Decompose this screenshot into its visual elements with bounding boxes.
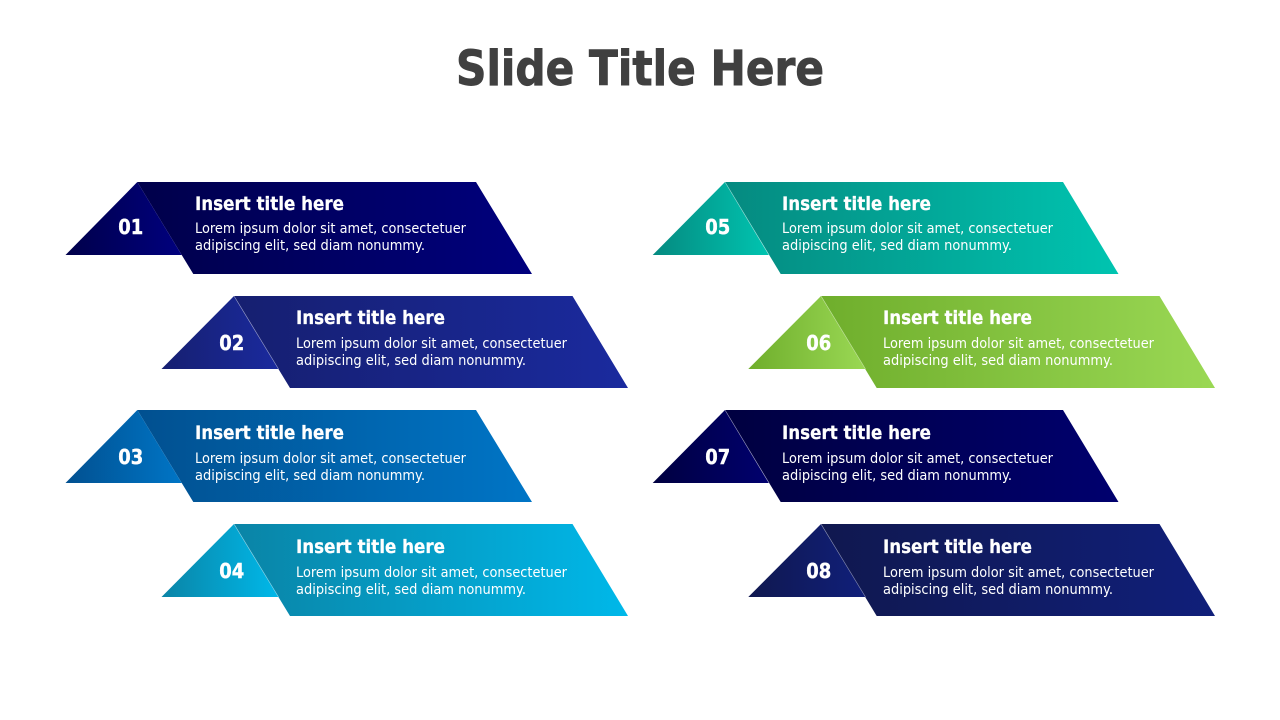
panel: item 08: Lorem ipsum dolor sit amet, consectetuer bbox=[883, 565, 1154, 581]
panel: item 06: Insert title here bbox=[883, 307, 1032, 329]
panel: item 01 bbox=[66, 182, 532, 274]
panel: item 07: adipiscing elit, sed diam nonummy. bbox=[782, 468, 1012, 484]
panel: item 04: Lorem ipsum dolor sit amet, consectetuer bbox=[296, 565, 567, 581]
panel: item 08 bbox=[748, 524, 1215, 616]
panel: item 02: 02 bbox=[219, 331, 244, 355]
panel: item 01: Insert title here bbox=[195, 193, 344, 215]
panel: item 03: 03 bbox=[118, 445, 143, 469]
panel: item 05: 05 bbox=[705, 215, 730, 239]
panel: item 06: adipiscing elit, sed diam nonummy. bbox=[883, 353, 1113, 369]
panel: item 05: Insert title here bbox=[782, 193, 931, 215]
panel: item 03: Lorem ipsum dolor sit amet, consectetuer bbox=[195, 451, 466, 467]
panel: item 04: Insert title here bbox=[296, 536, 445, 558]
panel: item 02 bbox=[162, 296, 628, 388]
title: Slide Title Here bbox=[456, 41, 824, 97]
panel: item 07 bbox=[653, 410, 1118, 502]
panel: item 06: Lorem ipsum dolor sit amet, consectetuer bbox=[883, 336, 1154, 352]
panel: item 07: Insert title here bbox=[782, 422, 931, 444]
panel: item 05 bbox=[653, 182, 1118, 274]
panel: item 03: Insert title here bbox=[195, 422, 344, 444]
panel: item 05: Lorem ipsum dolor sit amet, consectetuer bbox=[782, 221, 1053, 237]
panel: item 06: 06 bbox=[806, 331, 831, 355]
panel: item 08: Insert title here bbox=[883, 536, 1032, 558]
panel: item 01: Lorem ipsum dolor sit amet, consectetuer bbox=[195, 221, 466, 237]
panel: item 01: adipiscing elit, sed diam nonummy. bbox=[195, 238, 425, 254]
panel: item 08: adipiscing elit, sed diam nonummy. bbox=[883, 582, 1113, 598]
panel: item 03 bbox=[66, 410, 532, 502]
panel: item 08: 08 bbox=[806, 559, 831, 583]
panel: item 02: adipiscing elit, sed diam nonummy. bbox=[296, 353, 526, 369]
panel: item 03: adipiscing elit, sed diam nonummy. bbox=[195, 468, 425, 484]
panel: item 07: 07 bbox=[705, 445, 730, 469]
panel: item 05: adipiscing elit, sed diam nonummy. bbox=[782, 238, 1012, 254]
panel: item 04 bbox=[162, 524, 628, 616]
panel: item 04: adipiscing elit, sed diam nonummy. bbox=[296, 582, 526, 598]
panel: item 01: 01 bbox=[118, 215, 143, 239]
panel: item 02: Lorem ipsum dolor sit amet, consectetuer bbox=[296, 336, 567, 352]
panel: item 06 bbox=[748, 296, 1215, 388]
panel: item 02: Insert title here bbox=[296, 307, 445, 329]
panel: item 04: 04 bbox=[219, 559, 244, 583]
panel: item 07: Lorem ipsum dolor sit amet, consectetuer bbox=[782, 451, 1053, 467]
